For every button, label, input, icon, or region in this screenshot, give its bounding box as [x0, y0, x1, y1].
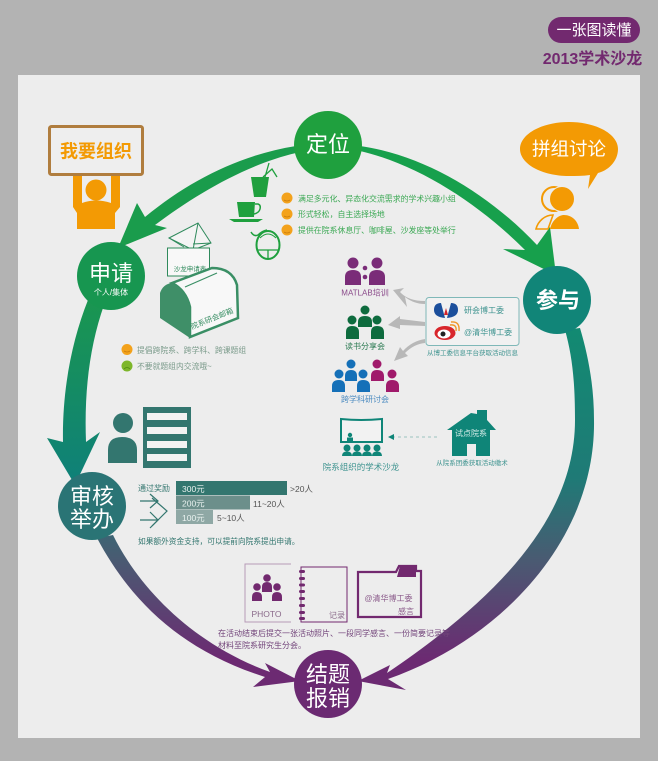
list: apply tips: 不要就题组内交流哦~ — [137, 361, 212, 371]
arrow: to matlab — [393, 288, 425, 307]
bar chart: reward tiers: 100元 — [182, 513, 205, 523]
icon: mailbox — [160, 268, 238, 338]
list: apply tips: 提倡跨院系、跨学科、跨课题组 — [137, 345, 246, 355]
icon: folder with comments: 感言 — [398, 606, 414, 616]
text: submission note: 材料至院系研究生分会。 — [218, 640, 306, 650]
icon: speech bubble and person: 拼组讨论 — [532, 138, 606, 160]
icon: person holding sign — [50, 126, 142, 229]
bar chart: reward tiers: 5~10人 — [217, 513, 245, 523]
text: submission note — [218, 628, 450, 650]
arrow: apply to review — [47, 300, 104, 485]
icon: interdisciplinary group: 跨学科研讨会 — [341, 394, 389, 404]
icon: departmental salon: 院系组织的学术沙龙 — [323, 462, 400, 472]
text: submission note: 在活动结束后提交一张活动照片、一段同学感言、一份简要记录等 — [218, 628, 450, 638]
label: reward: 通过奖励 — [138, 483, 170, 493]
arrow: to reading group — [388, 316, 425, 329]
icon: pilot department house: 从院系团委获取活动缴术 — [436, 458, 508, 467]
node: apply — [77, 242, 145, 310]
list: positioning points — [282, 192, 456, 236]
icon: folder with comments: @清华博工委 — [364, 593, 413, 603]
bar chart: reward tiers — [176, 481, 313, 524]
icon: interdisciplinary group — [332, 360, 399, 404]
arrow: review to closing — [97, 535, 300, 687]
icon: mouse — [251, 230, 280, 259]
arrow: join to closing — [358, 328, 594, 690]
icon: speech bubble and person — [520, 122, 618, 229]
arrow: positioning to apply — [118, 146, 296, 248]
node: review and host: 举办 — [70, 507, 114, 532]
icon: cold drink — [251, 163, 277, 197]
icon: notebook: 记录 — [329, 611, 345, 620]
form: salon application: 沙龙申请表 — [174, 264, 207, 273]
callout: notice sources: 研会博工委 — [464, 305, 504, 315]
node: join: 参与 — [536, 288, 580, 313]
icon: document list — [143, 407, 191, 468]
title tag: 一张图读懂 — [556, 22, 632, 39]
icon: matlab group: MATLAB培训 — [341, 288, 389, 298]
list: apply tips — [122, 344, 246, 372]
bar chart: reward tiers: 200元 — [182, 498, 205, 508]
icon: reading group: 读书分享会 — [345, 341, 385, 351]
form: salon application — [168, 248, 210, 276]
node: positioning — [294, 111, 362, 179]
icon: photo frame: PHOTO — [251, 609, 282, 619]
icon: photo frame — [245, 564, 291, 622]
icon: folder with comments — [358, 566, 421, 617]
arrow: to interdisciplinary group — [394, 339, 425, 361]
node: positioning: 定位 — [306, 132, 350, 157]
node: review and host: 审核 — [70, 484, 114, 509]
bar chart: reward tiers: 11~20人 — [253, 499, 285, 509]
title tag — [548, 17, 640, 43]
icon: reward arrows — [140, 494, 167, 528]
node: review and host — [58, 472, 126, 540]
list: positioning points: 满足多元化、异态化交流需求的学术兴趣小组 — [298, 194, 456, 204]
bar chart: reward tiers: 300元 — [182, 484, 205, 494]
callout: notice sources: 从博工委信息平台获取活动信息 — [427, 348, 518, 357]
node: closing and reimbursement: 结题 — [306, 662, 350, 687]
icon: envelopes — [169, 223, 211, 250]
callout: notice sources: @清华博工委 — [464, 327, 512, 337]
subtitle: 2013学术沙龙 — [543, 49, 642, 68]
icon: reviewer person — [108, 413, 137, 463]
node: closing and reimbursement — [294, 650, 362, 718]
icon: reading group — [345, 306, 385, 351]
node: join — [523, 266, 591, 334]
list: positioning points: 提供在院系休息厅、咖啡屋、沙发座等处举行 — [298, 225, 456, 235]
node: closing and reimbursement: 报销 — [306, 686, 350, 711]
icon: matlab group — [341, 258, 389, 298]
node: apply: 个人/集体 — [94, 287, 128, 297]
icon: notebook — [299, 567, 347, 622]
icon: pilot department house: 试点院系 — [455, 428, 487, 438]
callout: notice sources — [426, 298, 519, 357]
node: apply: 申请 — [89, 261, 133, 286]
arrow: dashed pilot to salon — [388, 434, 439, 440]
icon: departmental salon — [323, 419, 400, 472]
icon: mailbox: 院系研会邮箱 — [189, 305, 235, 331]
arrow: positioning to join — [360, 146, 556, 275]
text: extra funding note: 如果额外资金支持，可以提前向院系提出申请。 — [138, 536, 299, 546]
list: positioning points: 形式轻松，自主选择场地 — [298, 209, 385, 219]
icon: pilot department house — [436, 410, 508, 467]
icon: person holding sign: 我要组织 — [60, 142, 132, 162]
bar chart: reward tiers: >20人 — [290, 484, 313, 494]
icon: coffee cup — [229, 202, 263, 222]
